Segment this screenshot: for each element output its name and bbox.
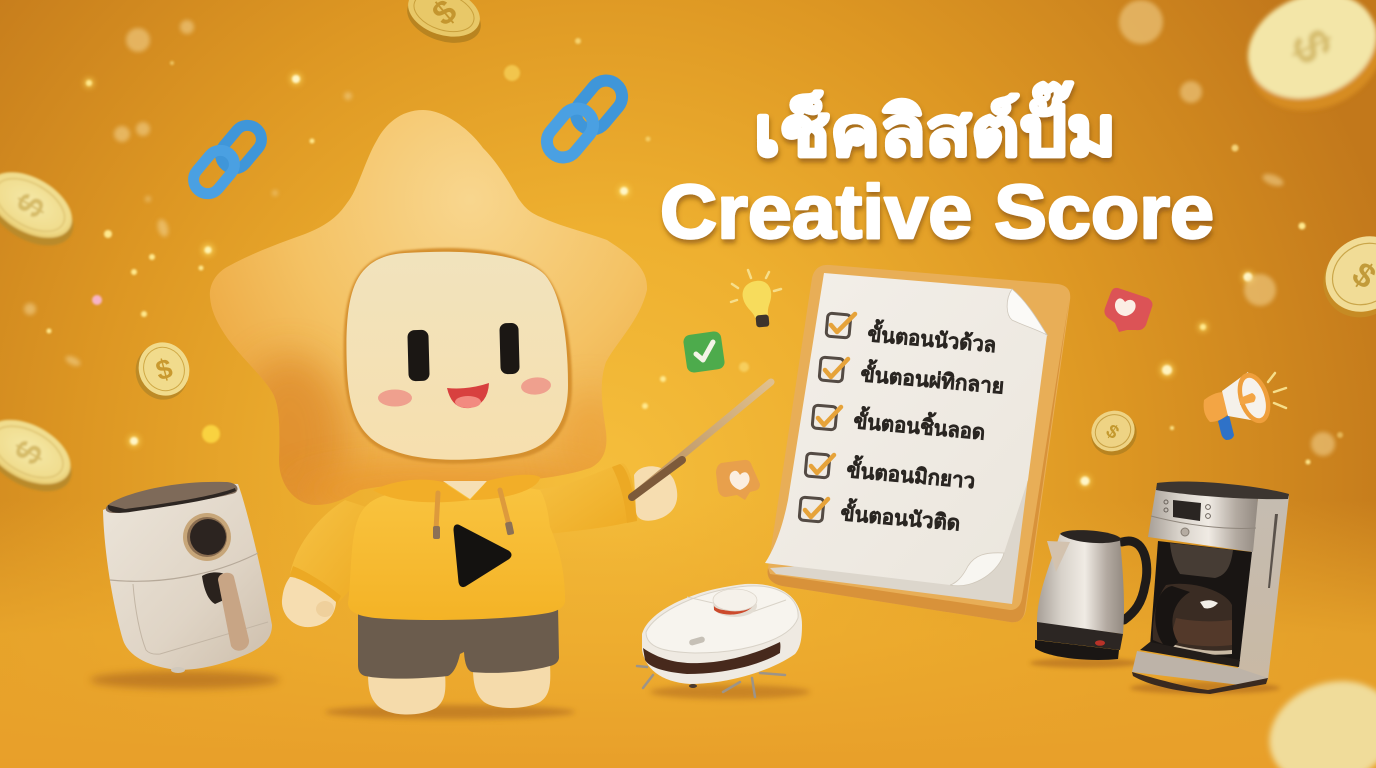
checklist item 1 — [826, 313, 998, 357]
coin: right edge — [1308, 221, 1376, 333]
icon: light bulb — [731, 270, 781, 328]
checklist item 2 — [819, 357, 1005, 399]
coin: top — [401, 0, 487, 52]
legs — [368, 664, 550, 715]
mouth — [447, 383, 489, 408]
title line 1 thai: เช็คลิสต์ปั๊ม — [754, 81, 1116, 170]
title — [660, 81, 1214, 255]
face — [346, 252, 568, 460]
coin: near kettle — [1084, 404, 1144, 463]
checklist item 5: ขั้นตอนนัวติด — [840, 497, 962, 535]
checklist item 5 — [799, 497, 962, 535]
paper stack — [770, 335, 1046, 604]
title line 2: Creative Score — [660, 170, 1214, 255]
icon: green check tile — [683, 331, 725, 373]
hoodie collar and drawstrings — [373, 475, 540, 539]
hoodie body — [348, 484, 565, 620]
paper — [765, 273, 1047, 585]
character: star mascot — [210, 110, 771, 719]
air fryer — [90, 482, 280, 689]
coin: blurred top right: $ — [1279, 21, 1344, 72]
coin: upper left — [0, 159, 85, 259]
play icon — [455, 526, 510, 586]
coin: blurred top right — [1232, 0, 1376, 130]
icon: heart bubble small — [716, 460, 760, 500]
coin: blurred bottom right — [1255, 664, 1376, 768]
kettle — [1030, 530, 1147, 668]
coin: upper left: $ — [8, 186, 53, 224]
coin: near kettle: $ — [1102, 421, 1123, 444]
icon: blue chain link left — [188, 120, 267, 199]
icon: blue chain link right — [540, 74, 629, 164]
right arm with hand — [530, 463, 677, 534]
checklist item 4 — [805, 453, 977, 493]
top corner curl — [1007, 289, 1047, 335]
coin: middle left: $ — [153, 352, 176, 386]
checklist item 3 — [812, 405, 987, 444]
bokeh sparkles — [24, 0, 1343, 487]
icon: megaphone — [1204, 369, 1286, 440]
board — [768, 265, 1070, 622]
star head — [210, 110, 647, 525]
shorts — [358, 606, 559, 679]
checklist item 4: ขั้นตอนมิกยาว — [846, 454, 977, 493]
coin: middle left — [127, 334, 198, 408]
left hand — [282, 577, 336, 627]
clipboard — [765, 265, 1070, 622]
coin: lower left — [0, 407, 82, 504]
hood opening — [344, 248, 572, 464]
bottom corner curl — [950, 553, 1004, 586]
pointer stick — [632, 382, 771, 505]
coffee maker — [1130, 481, 1289, 694]
left arm — [290, 500, 375, 604]
checklist item 2: ขั้นตอนผ่ทิกลาย — [860, 358, 1005, 399]
robot vacuum — [637, 584, 810, 699]
icon: heart tile — [1104, 288, 1152, 332]
checklist item 1: ขั้นตอนนัวด้วล — [867, 318, 998, 357]
checklist item 3: ขั้นตอนชิ้นลอด — [853, 405, 987, 444]
coin: lower left: $ — [6, 433, 51, 471]
eyes — [407, 323, 520, 381]
cheeks — [378, 376, 552, 406]
